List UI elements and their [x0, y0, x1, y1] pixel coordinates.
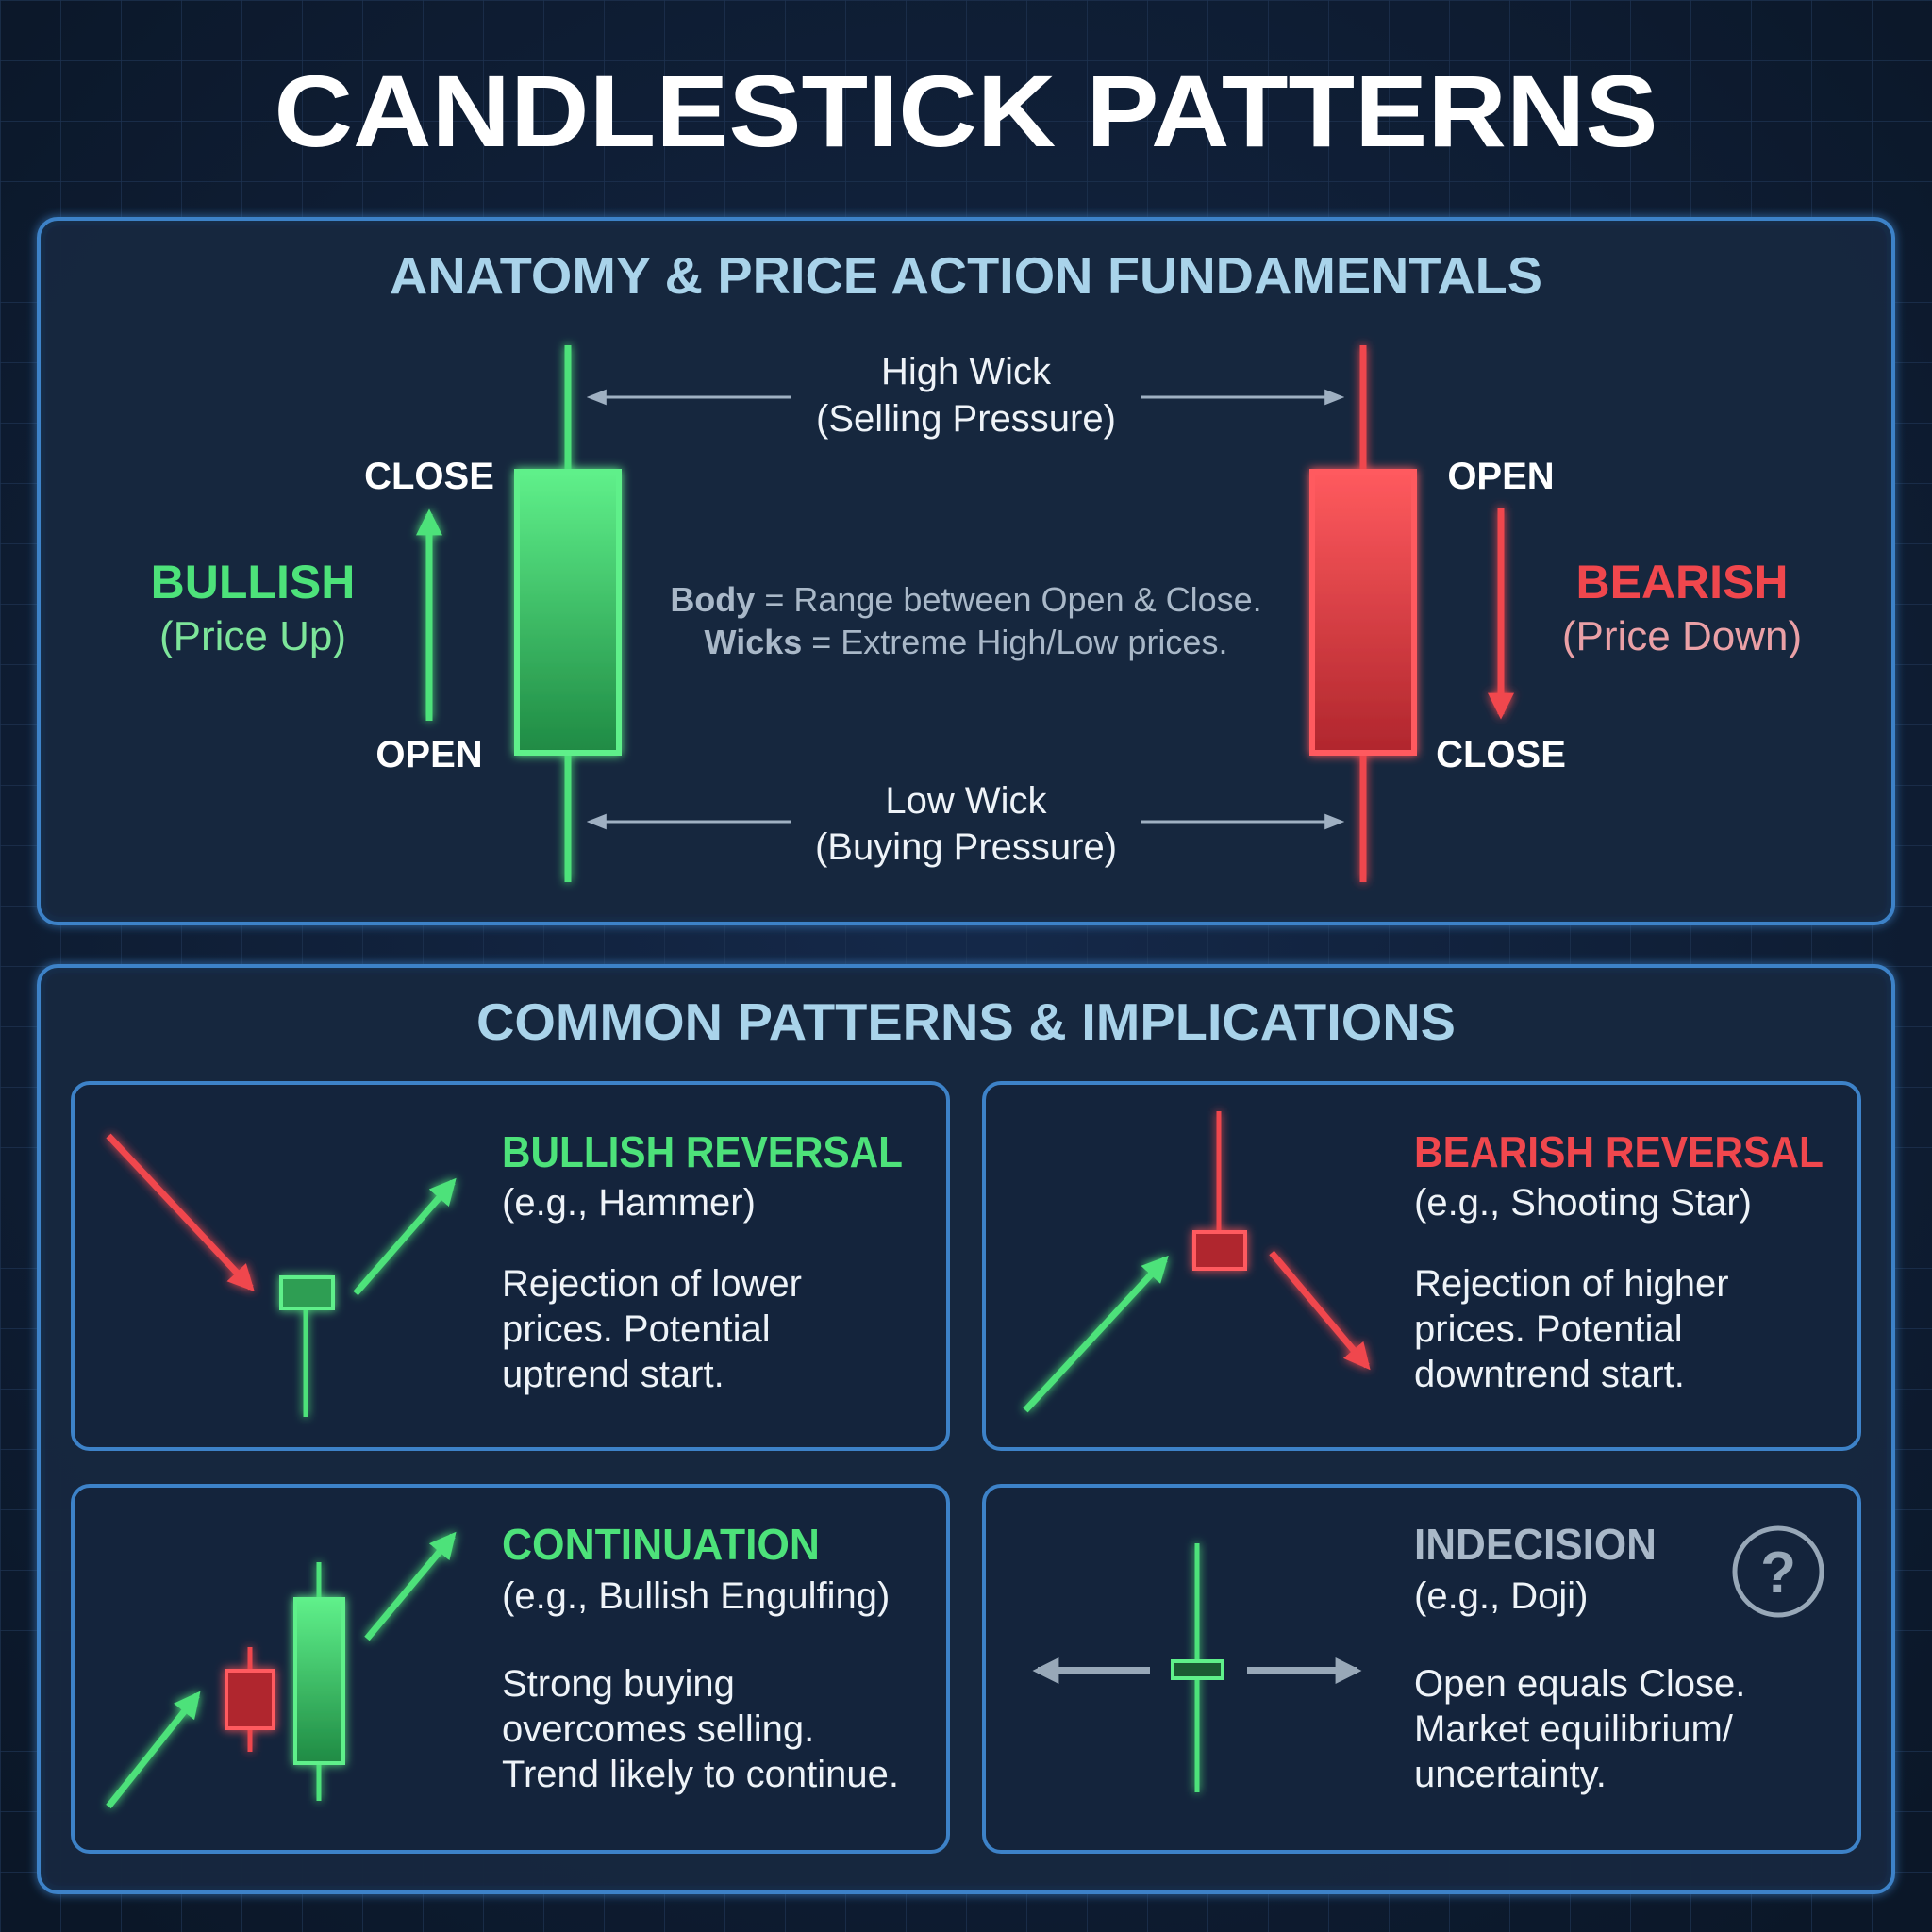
text: bullish reversal [502, 1127, 903, 1395]
low wick label [591, 780, 1341, 868]
text: bullish reversal: uptrend start. [502, 1354, 724, 1395]
icon: engulfing [108, 1536, 453, 1807]
high wick label: High Wick [881, 351, 1052, 392]
text: continuation: Strong buying [502, 1663, 735, 1705]
bullish labels [151, 456, 494, 775]
text: indecision: (e.g., Doji) [1414, 1575, 1589, 1617]
bearish labels: CLOSE [1436, 734, 1566, 775]
bearish labels: BEARISH [1575, 556, 1789, 608]
text: bearish reversal: prices. Potential [1414, 1308, 1683, 1350]
high wick label: (Selling Pressure) [816, 398, 1116, 440]
icon: hammer [108, 1136, 453, 1417]
card: indecision [984, 1486, 1859, 1852]
bullish labels: (Price Up) [159, 613, 346, 659]
icon: question: ? [1760, 1541, 1796, 1606]
text: indecision: INDECISION [1414, 1520, 1657, 1569]
icon: doji [1038, 1543, 1357, 1792]
text: indecision [1414, 1520, 1745, 1795]
text: bearish reversal: (e.g., Shooting Star) [1414, 1182, 1752, 1224]
bearish labels: OPEN [1447, 456, 1555, 497]
card: bearish reversal [984, 1083, 1859, 1449]
bullish candle [517, 345, 619, 882]
bearish labels [1436, 456, 1802, 775]
text: continuation: (e.g., Bullish Engulfing) [502, 1575, 890, 1617]
card: bullish reversal [73, 1083, 948, 1449]
low wick label: Low Wick [885, 780, 1048, 822]
text: bullish reversal: (e.g., Hammer) [502, 1182, 756, 1224]
bearish labels: (Price Down) [1562, 613, 1802, 659]
bullish labels: OPEN [375, 734, 483, 775]
text: bearish reversal: downtrend start. [1414, 1354, 1685, 1395]
panel: common patterns [39, 966, 1893, 1892]
icon: question [1735, 1528, 1822, 1615]
text: continuation: overcomes selling. [502, 1708, 814, 1750]
panel: anatomy [39, 219, 1893, 924]
text: bearish reversal: BEARISH REVERSAL [1414, 1127, 1824, 1176]
text: bullish reversal: prices. Potential [502, 1308, 771, 1350]
bullish labels: CLOSE [364, 456, 494, 497]
text: bearish reversal: Rejection of higher [1414, 1263, 1729, 1305]
text: continuation [502, 1520, 899, 1795]
text: bullish reversal: BULLISH REVERSAL [502, 1127, 903, 1176]
text: indecision: uncertainty. [1414, 1754, 1607, 1795]
icon: shooting star [1025, 1111, 1367, 1410]
text: bullish reversal: Rejection of lower [502, 1263, 802, 1305]
card: continuation [73, 1486, 948, 1852]
high wick label [591, 351, 1341, 440]
text: indecision: Market equilibrium/ [1414, 1708, 1734, 1750]
bullish labels: BULLISH [151, 556, 355, 608]
body/wick explanation: Wicks = Extreme High/Low prices. [705, 623, 1227, 661]
title: CANDLESTICK PATTERNS [274, 54, 1658, 168]
text: continuation: Trend likely to continue. [502, 1754, 899, 1795]
heading: patterns: COMMON PATTERNS & IMPLICATIONS [476, 992, 1456, 1051]
body/wick explanation [670, 580, 1262, 661]
text: indecision: Open equals Close. [1414, 1663, 1745, 1705]
text: bearish reversal [1414, 1127, 1824, 1395]
body/wick explanation: Body = Range between Open & Close. [670, 580, 1262, 619]
text: continuation: CONTINUATION [502, 1520, 820, 1569]
bearish candle [1312, 345, 1414, 882]
low wick label: (Buying Pressure) [815, 826, 1117, 868]
heading: anatomy: ANATOMY & PRICE ACTION FUNDAMENTALS [390, 246, 1542, 305]
